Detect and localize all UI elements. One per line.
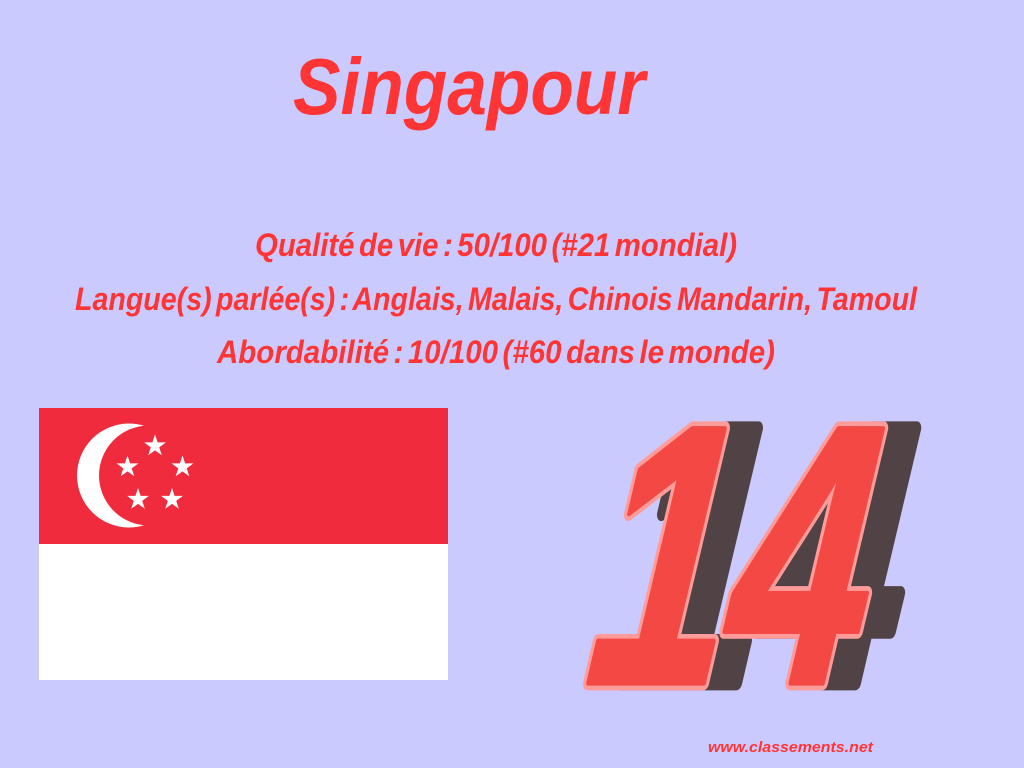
rank number 14: 14 bbox=[576, 349, 897, 762]
rank number 14: 14 bbox=[576, 349, 897, 762]
icon: Singapore flag bbox=[39, 408, 448, 680]
source credit: www.classements.net bbox=[708, 740, 874, 756]
fact: languages: Langue(s) parlée(s) : Anglais, Malais, Chinois Mandarin, Tamoul bbox=[75, 281, 918, 317]
text block: key facts bbox=[75, 227, 918, 370]
fact: quality of life: Qualité de vie : 50/100 (#21 mondial) bbox=[255, 227, 737, 263]
rank number 14: 14 bbox=[609, 349, 930, 762]
title: Singapour bbox=[293, 42, 648, 131]
fact: affordability: Abordabilité : 10/100 (#60 dans le monde) bbox=[216, 334, 775, 370]
